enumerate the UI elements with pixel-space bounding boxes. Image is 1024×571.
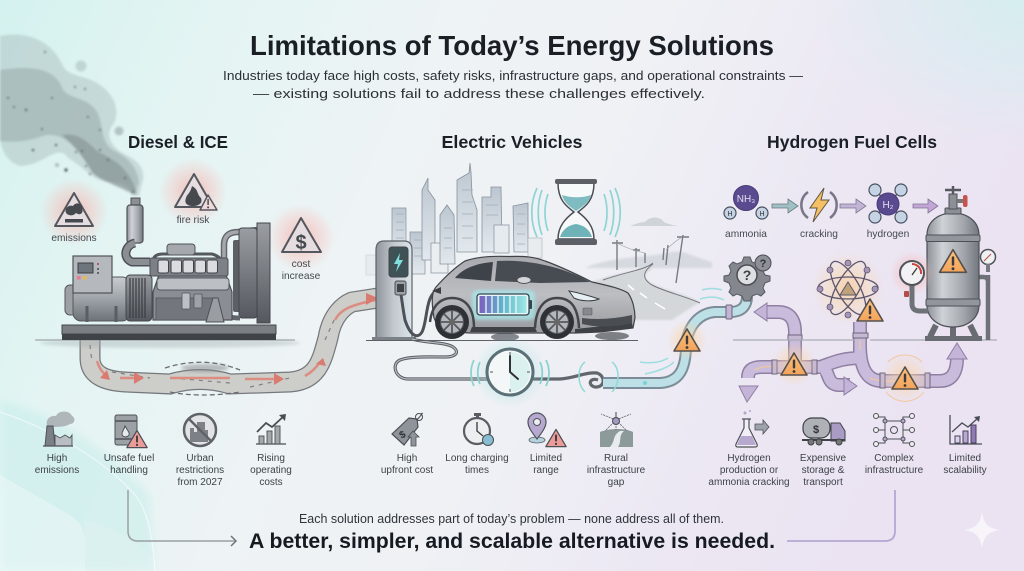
label: Complex infrastructure [865, 453, 924, 476]
subtitle [223, 68, 804, 101]
pressure gauge left [890, 251, 934, 311]
hourglass [532, 179, 620, 245]
purple pipe arrowheads [739, 303, 967, 402]
label: Rural infrastructure gap: gap [608, 477, 625, 488]
icon: urban restrictions [184, 414, 216, 446]
arrow: hydrogen to tank [913, 199, 938, 213]
icon: hydrogen flask [736, 410, 769, 447]
front wheel [535, 298, 579, 339]
warnings on purple pipes [772, 342, 929, 402]
label: High upfront cost [381, 453, 433, 476]
label: Complex infrastructure: infrastructure [865, 465, 924, 476]
warning: cost increase: $ [295, 232, 307, 254]
arrow: ammonia to cracking [772, 199, 798, 213]
icon: limited range pin [528, 413, 566, 447]
gear with question mark: ? [760, 258, 767, 270]
label: Expensive storage & transport: Expensive [800, 453, 847, 464]
label: Rural infrastructure gap: Rural [604, 453, 628, 464]
sparkle [964, 512, 1000, 548]
diesel pipe [90, 293, 378, 395]
subtitle: Industries today face high costs, safety risks, infrastructure gaps, and operational constraints — [223, 68, 804, 83]
label: Rising operating costs [250, 453, 292, 488]
pressure gauge right [980, 250, 996, 272]
icon: rising costs chart [256, 414, 286, 444]
label: Unsafe fuel handling: Unsafe fuel [104, 453, 154, 464]
call to action: A better, simpler, and scalable alternative is needed. [249, 529, 775, 553]
label: Hydrogen production or ammonia cracking: Hydrogen [727, 453, 771, 464]
hydrogen flow: cracking: cracking [800, 229, 838, 240]
hydrogen flow: ammonia: NH₃ [737, 194, 755, 205]
hydrogen flow: cracking [800, 188, 838, 240]
label: High upfront cost: upfront cost [381, 465, 433, 476]
hydrogen flow: ammonia: H [727, 211, 733, 218]
label: Limited scalability [943, 453, 987, 476]
label: Rising operating costs: Rising [257, 453, 285, 464]
warning: fire risk: fire risk [177, 215, 210, 226]
label: Limited range: Limited [530, 453, 562, 464]
label: Urban restrictions from 2027: Urban [186, 453, 214, 464]
warning: cost increase [267, 204, 335, 282]
charge plug [432, 287, 441, 294]
label: Limited scalability: scalability [943, 465, 987, 476]
car lower trim [470, 323, 633, 333]
warning: cost increase: increase [282, 271, 321, 282]
hydrogen flow: hydrogen molecule [867, 184, 909, 240]
label: High emissions: emissions [35, 465, 79, 476]
summary line: Each solution addresses part of today’s problem — none address all of them. [299, 512, 724, 526]
label: Complex infrastructure: Complex [874, 453, 914, 464]
headlight and grille [569, 291, 599, 301]
charging cable [395, 290, 603, 387]
label: Long charging times: Long charging [445, 453, 509, 464]
label: High emissions [35, 453, 79, 476]
hydrogen flow: hydrogen molecule: hydrogen [867, 229, 909, 240]
label: Limited scalability: Limited [949, 453, 981, 464]
purple pipes [748, 312, 957, 385]
icon: rural infrastructure [600, 412, 633, 447]
hydrogen flow: hydrogen molecule: H₂ [882, 200, 894, 211]
smoke from diesel exhaust [0, 34, 143, 196]
battery graphic [472, 290, 535, 320]
bottom left connector arrow [128, 490, 236, 546]
swirl glow [579, 362, 618, 392]
clock on cable [471, 336, 549, 408]
label: Rural infrastructure gap [587, 453, 646, 488]
hydrogen flow: ammonia: H [759, 211, 765, 218]
icon: complex infrastructure [874, 414, 914, 446]
label: High emissions: High [47, 453, 67, 464]
electric car [366, 256, 638, 341]
label: Limited range: range [533, 465, 559, 476]
label: Unsafe fuel handling: handling [110, 465, 148, 476]
radiator [224, 223, 270, 323]
hydrogen flow: ammonia [724, 186, 768, 240]
label: Limited range [530, 453, 562, 476]
label: Unsafe fuel handling [104, 453, 154, 476]
label: Long charging times [445, 453, 509, 476]
warning: fire risk [159, 158, 227, 226]
heading: Hydrogen Fuel Cells: Hydrogen Fuel Cells [767, 132, 937, 152]
radiator cooling pipes [224, 230, 258, 262]
label: Urban restrictions from 2027: restrictions [176, 465, 224, 476]
warning: emissions [40, 178, 108, 246]
car side windows [455, 261, 590, 284]
diesel generator [35, 198, 300, 348]
skid base [62, 325, 276, 340]
charging station [372, 241, 416, 341]
city skyline [366, 163, 542, 275]
warning: cost increase: cost [292, 259, 311, 270]
subtitle: — existing solutions fail to address these challenges effectively. [253, 86, 705, 101]
label: Urban restrictions from 2027: from 2027 [177, 477, 223, 488]
hydrogen flow: ammonia: ammonia [725, 229, 767, 240]
bottom right connector [787, 490, 895, 541]
warning: teal pipe [667, 320, 707, 360]
heading: Electric Vehicles: Electric Vehicles [442, 132, 583, 152]
title: Limitations of Today’s Energy Solutions [250, 30, 774, 61]
pipe collars [772, 333, 930, 388]
arrow: cracking to hydrogen [840, 199, 866, 213]
control box [73, 256, 112, 293]
label: High upfront cost: High [397, 453, 417, 464]
label: Hydrogen production or ammonia cracking: production or [720, 465, 779, 476]
label: Rising operating costs: operating [250, 465, 292, 476]
label: Hydrogen production or ammonia cracking [708, 453, 790, 488]
label: Hydrogen production or ammonia cracking: ammonia cracking [708, 477, 790, 488]
label: Expensive storage & transport [800, 453, 847, 488]
label: Urban restrictions from 2027 [176, 453, 224, 488]
label: Rising operating costs: costs [259, 477, 283, 488]
icon: limited scalability chart [950, 415, 982, 444]
icon: high upfront cost tag [392, 413, 422, 446]
warning: emissions: emissions [51, 233, 97, 244]
rural road and poles [585, 218, 712, 320]
teal pipe [603, 288, 747, 385]
heading: Diesel & ICE: Diesel & ICE [128, 132, 228, 152]
label: Rural infrastructure gap: infrastructure [587, 465, 646, 476]
label: Expensive storage & transport: storage & [802, 465, 845, 476]
atom hazard [812, 252, 884, 324]
icon: fuel barrel hazard [115, 415, 147, 448]
alternator [65, 275, 152, 322]
hydrogen tank [925, 186, 988, 341]
gear with question mark: ? [743, 267, 751, 283]
ground line [733, 339, 997, 341]
label: Expensive storage & transport: transport [803, 477, 843, 488]
gear with question mark [724, 255, 771, 301]
engine block [150, 244, 232, 322]
icon: stopwatch [464, 413, 494, 446]
rear wheel [430, 298, 474, 339]
icon: factory high emissions [43, 412, 74, 446]
icon: storage tanker [802, 418, 845, 445]
icon: storage tanker: $ [813, 424, 819, 436]
exhaust stack [126, 198, 150, 262]
icon: high upfront cost tag: $ [398, 429, 408, 441]
label: Long charging times: times [465, 465, 489, 476]
